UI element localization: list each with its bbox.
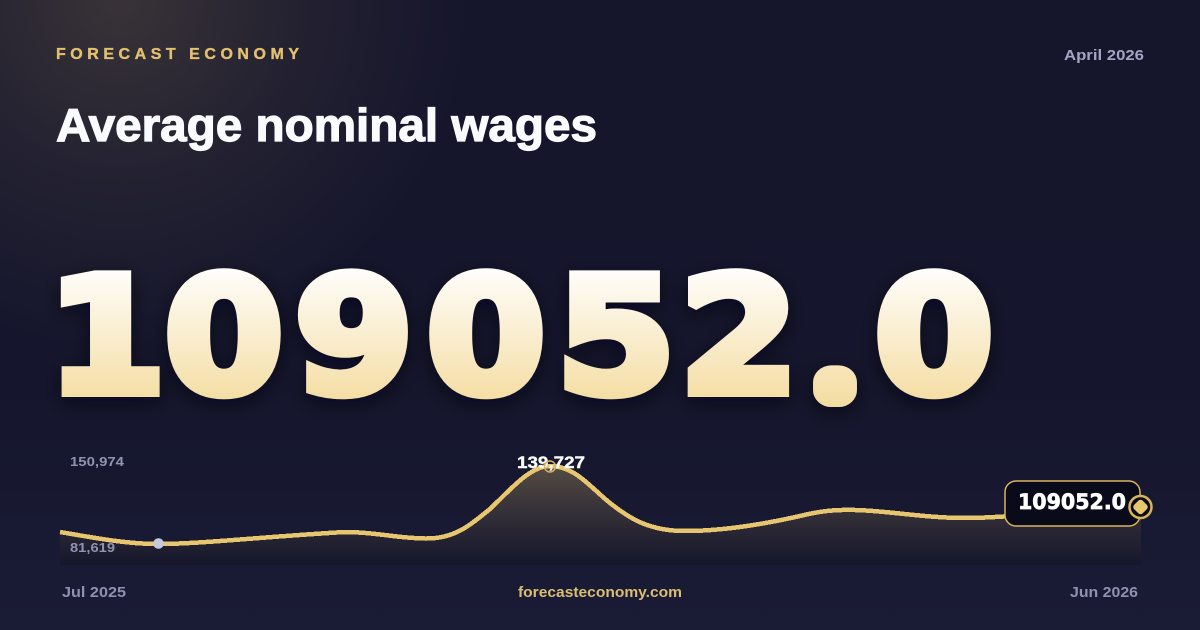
current value callout — [1005, 481, 1140, 526]
peak value label: 139,727 — [517, 453, 585, 472]
headline value: 0 — [874, 244, 994, 431]
brand label: FORECAST ECONOMY — [56, 46, 299, 63]
current value marker — [1130, 496, 1152, 518]
line chart — [60, 453, 1152, 565]
headline value: . — [827, 353, 843, 400]
title: Average nominal wages — [56, 99, 597, 151]
source website: forecasteconomy.com — [518, 584, 682, 601]
min axis label: 81,619 — [70, 540, 115, 555]
headline value: 109052 — [47, 244, 799, 431]
chart area fill — [60, 466, 1141, 565]
start date label: Jul 2025 — [62, 584, 126, 601]
low point marker — [153, 538, 164, 549]
end date label: Jun 2026 — [1070, 584, 1138, 601]
peak marker — [544, 461, 556, 472]
current value callout: 109052.0 — [1018, 490, 1126, 514]
date label: April 2026 — [1064, 47, 1144, 64]
chart line — [60, 466, 1141, 544]
max axis label: 150,974 — [70, 454, 125, 469]
